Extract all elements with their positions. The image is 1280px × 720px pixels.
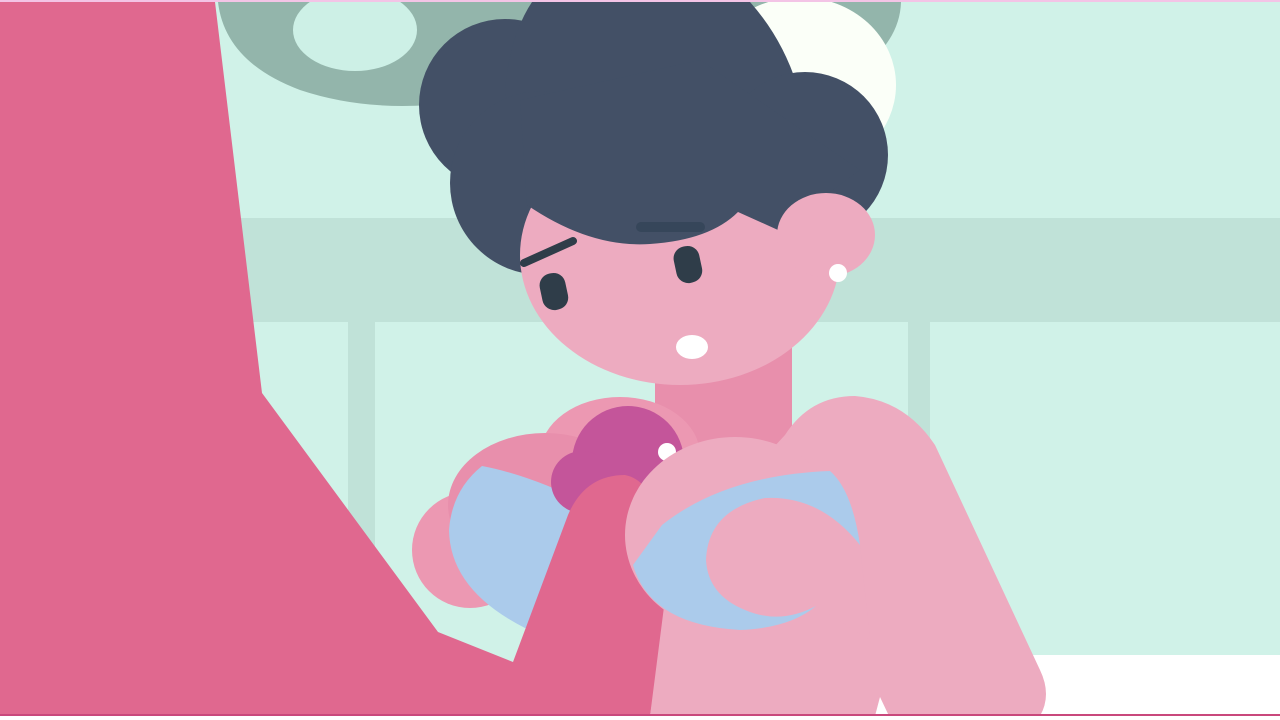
patient right arm [650,396,1046,716]
hair back [419,2,888,275]
right chest with garment [625,437,870,640]
hair front [520,60,860,244]
face [520,125,840,385]
surgical lamp [218,0,901,173]
clinician arm [0,2,668,716]
eyebrows [524,227,700,263]
mouth [676,335,708,359]
ear and earring [777,193,875,282]
purple hand [551,406,684,518]
patient left side [412,433,642,630]
neck and chest [540,340,792,513]
eyes [537,244,704,312]
floor gap accent [875,697,889,716]
